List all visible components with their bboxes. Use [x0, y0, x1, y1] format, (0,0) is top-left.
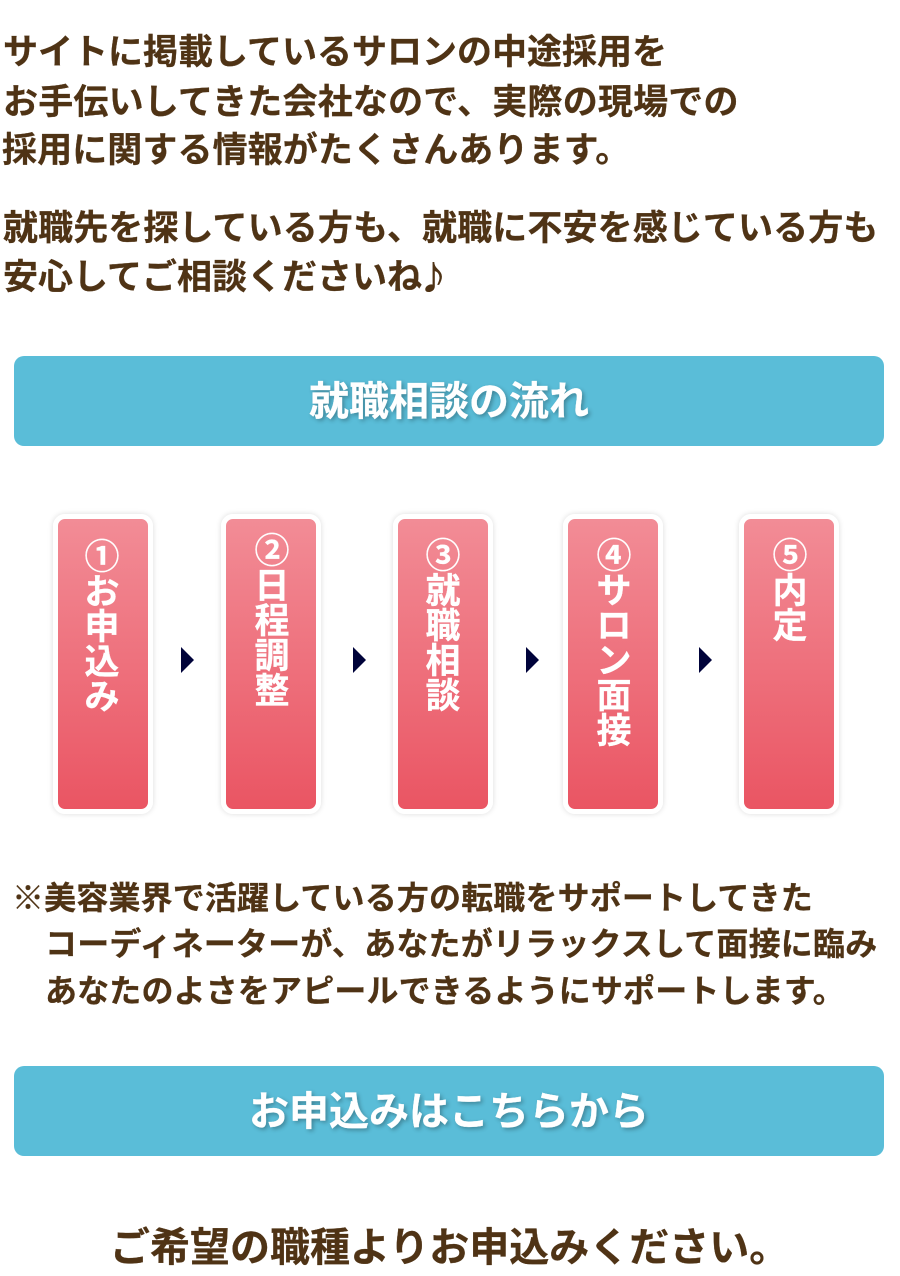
step 4 card: ン	[596, 642, 632, 681]
intro text: 安心してご相談くださいね	[3, 258, 422, 297]
step 4 card: ④	[596, 537, 632, 576]
intro text: お手伝いしてきた会社なので、実際の現場での	[3, 83, 739, 122]
step 5 card: 内	[772, 572, 808, 611]
step 4 card: 接	[596, 712, 632, 751]
intro text: 就職先を探している方も、就職に不安を感じている方も	[3, 209, 878, 248]
note text: あなたのよさをアピールできるようにサポートします。	[45, 973, 845, 1009]
intro text	[2, 33, 878, 298]
intro text: ♪	[418, 253, 449, 298]
step 2 card: 整	[254, 672, 290, 711]
step 5 card: ⑤	[772, 537, 808, 576]
intro text: サイトに掲載しているサロンの中途採用を	[3, 33, 667, 72]
step 1 card: み	[84, 678, 120, 717]
arrow 1	[181, 647, 194, 673]
step 2 card: 日	[254, 567, 290, 606]
note text: コーディネーターが、あなたがリラックスして面接に臨み	[45, 926, 877, 962]
step 1 card: お	[84, 573, 120, 612]
heading: consultation flow: 就職相談の流れ	[309, 380, 589, 424]
step 1 card: 申	[84, 608, 120, 647]
step 1 card: ①	[84, 538, 120, 577]
step 3 card	[393, 514, 493, 814]
step 1 card: 込	[84, 643, 120, 682]
step 4 card: ロ	[596, 607, 632, 646]
step 3 card: 職	[425, 607, 460, 646]
step 4 card: 面	[596, 677, 632, 716]
step 3 card: ③	[425, 537, 460, 576]
step 2 card: ②	[254, 532, 290, 571]
heading: apply here: お申込みはこちらから	[249, 1090, 649, 1134]
step 3 card: 相	[425, 642, 460, 681]
step 2 card: 調	[254, 637, 290, 676]
step 5 card: 定	[772, 607, 808, 646]
note text: ※美容業界で活躍している方の転職をサポートしてきた	[12, 880, 813, 916]
step 1 card	[53, 514, 153, 814]
intro text: 採用に関する情報がたくさんあります。	[2, 131, 630, 170]
step 5 card	[739, 514, 839, 814]
arrow 2	[353, 647, 366, 673]
step 4 card	[563, 514, 663, 814]
closing message: ご希望の職種よりお申込みください。	[110, 1226, 789, 1270]
step 2 card	[221, 514, 321, 814]
heading: apply here	[14, 1066, 884, 1156]
step 3 card: 就	[425, 572, 460, 611]
heading: consultation flow	[14, 356, 884, 446]
note text	[12, 880, 877, 1009]
step 3 card: 談	[425, 677, 460, 716]
step 2 card: 程	[254, 602, 290, 641]
arrow 4	[699, 647, 712, 673]
step 4 card: サ	[596, 572, 632, 611]
arrow 3	[526, 647, 539, 673]
